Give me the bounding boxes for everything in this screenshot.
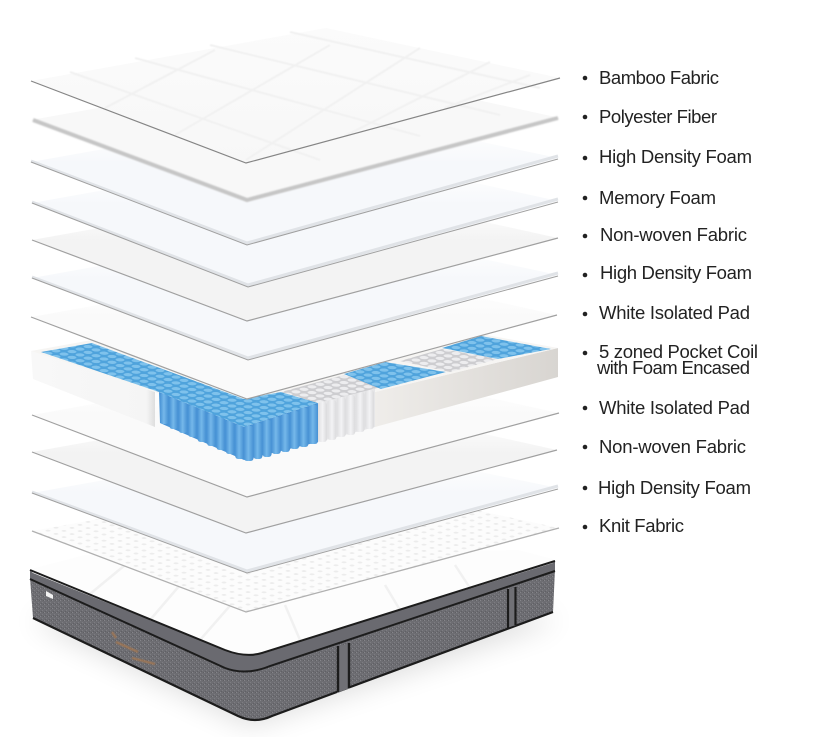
layer: white isolated pad (upper) xyxy=(31,264,557,399)
top piping xyxy=(30,561,555,655)
layer: high density foam (middle) xyxy=(32,225,558,360)
gray zone top right xyxy=(400,349,498,372)
label: 5 zoned Pocket Coil with Foam Encased: 5 zoned Pocket Coil xyxy=(599,341,758,362)
blue coils right side xyxy=(244,403,318,461)
label: High Density Foam: High Density Foam xyxy=(599,146,752,167)
layer: high density foam (lower) xyxy=(32,440,558,573)
label: 5 zoned Pocket Coil with Foam Encased: with Foam Encased xyxy=(596,357,750,378)
label: 5 zoned Pocket Coil with Foam Encased xyxy=(583,341,758,378)
blue zone top middle xyxy=(344,362,446,389)
right handle xyxy=(507,587,516,628)
layer: memory foam xyxy=(32,150,558,287)
label: Non-woven Fabric: Non-woven Fabric xyxy=(599,436,746,457)
layer labels xyxy=(583,67,758,536)
layer: high density foam (upper) xyxy=(31,109,558,245)
core top rim xyxy=(31,334,558,428)
orange logo xyxy=(112,632,155,664)
base mattress xyxy=(30,550,555,720)
label: Polyester Fiber: Polyester Fiber xyxy=(599,106,717,127)
right foam wall xyxy=(375,348,558,427)
layer: bamboo fabric xyxy=(31,28,560,163)
label: Memory Foam: Memory Foam xyxy=(599,187,716,208)
upper border band xyxy=(30,561,555,672)
quilted diamonds xyxy=(70,32,540,160)
pocket coil core with foam encasement xyxy=(31,334,558,461)
blue coils left side xyxy=(159,392,244,460)
label: High Density Foam: High Density Foam xyxy=(600,262,752,283)
label: White Isolated Pad: White Isolated Pad xyxy=(599,397,750,418)
middle piping xyxy=(30,571,555,672)
left handle xyxy=(337,643,350,693)
mattress shadow xyxy=(30,570,560,726)
blue zone top left xyxy=(41,343,318,427)
label: Knit Fabric: Knit Fabric xyxy=(599,515,684,536)
layer: white isolated pad (lower) xyxy=(32,362,559,497)
mattress side panel xyxy=(30,570,555,720)
gray zone top xyxy=(281,375,381,403)
bottom piping xyxy=(33,612,553,720)
label: High Density Foam: High Density Foam xyxy=(598,477,751,498)
blue zone top right xyxy=(442,336,551,359)
layer: knit fabric xyxy=(32,478,559,612)
quilting on pillow top xyxy=(90,565,470,640)
pillow top xyxy=(30,550,555,655)
layer: non-woven fabric (upper) xyxy=(32,187,558,321)
layer: polyester fiber xyxy=(31,67,560,202)
white tag xyxy=(46,591,53,599)
label: Bamboo Fabric: Bamboo Fabric xyxy=(599,67,719,88)
label: White Isolated Pad: White Isolated Pad xyxy=(599,302,750,323)
layer: non-woven fabric (lower) xyxy=(32,399,557,533)
left foam wall xyxy=(31,351,155,427)
gray coils side xyxy=(318,388,375,442)
label: Non-woven Fabric: Non-woven Fabric xyxy=(600,224,747,245)
